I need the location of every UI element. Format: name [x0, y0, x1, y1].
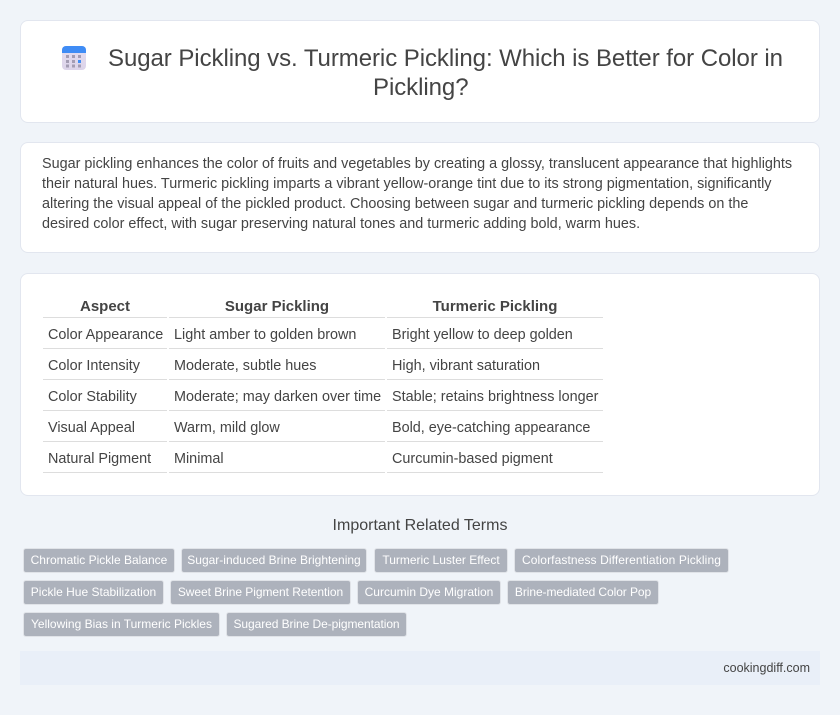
row: Color Intensity: Color Intensity — [48, 358, 140, 374]
comparison table: Bright yellow to deep golden — [392, 327, 573, 343]
header: Sugar Pickling: Sugar Pickling — [225, 298, 329, 315]
footer source: cookingdiff.com — [723, 661, 810, 675]
related terms tags — [23, 548, 729, 637]
related terms heading: Important Related Terms — [333, 517, 507, 534]
comparison table panel — [20, 273, 820, 496]
tag: Yellowing Bias in Turmeric Pickles — [31, 617, 212, 631]
tag — [23, 612, 220, 637]
tag — [23, 548, 175, 573]
comparison table: High, vibrant saturation — [392, 358, 540, 374]
tag — [170, 580, 351, 605]
tag — [507, 580, 659, 605]
icon: calendar — [62, 46, 86, 70]
comparison table: Bold, eye-catching appearance — [392, 420, 590, 436]
intro text: Sugar pickling enhances the color of fruits and vegetables by creating a glossy, translucent appearance that highlights — [42, 156, 792, 172]
comparison table: Warm, mild glow — [174, 420, 280, 436]
tag: Sweet Brine Pigment Retention — [178, 585, 343, 599]
tag — [181, 548, 367, 573]
intro text — [42, 156, 792, 232]
tag: Colorfastness Differentiation Pickling — [522, 553, 721, 567]
header: Turmeric Pickling: Turmeric Pickling — [433, 298, 557, 315]
tag: Curcumin Dye Migration — [365, 585, 493, 599]
header: Aspect: Aspect — [80, 298, 130, 315]
row: Color Stability: Color Stability — [48, 389, 137, 405]
comparison table: Minimal — [174, 451, 224, 467]
title — [108, 45, 783, 101]
row: Color Appearance: Color Appearance — [48, 327, 163, 343]
row: Natural Pigment: Natural Pigment — [48, 451, 151, 467]
footer bar — [20, 651, 820, 685]
comparison table: Moderate, subtle hues — [174, 358, 316, 374]
tag: Sugared Brine De-pigmentation — [233, 617, 400, 631]
row: Visual Appeal: Visual Appeal — [48, 420, 135, 436]
tag: Sugar-induced Brine Brightening — [187, 553, 361, 567]
tag: Brine-mediated Color Pop — [515, 585, 651, 599]
tag — [23, 580, 164, 605]
header panel — [20, 20, 820, 123]
intro text: desired color effect, with sugar preserving natural tones and turmeric adding bold, warm hues. — [42, 216, 640, 232]
text: Pickling? — [373, 74, 469, 101]
text: Sugar Pickling vs. Turmeric Pickling: Which is Better for Color in — [108, 45, 783, 72]
comparison table: Stable; retains brightness longer — [392, 389, 598, 405]
tag: Pickle Hue Stabilization — [31, 585, 156, 599]
intro text: their natural hues. Turmeric pickling imparts a vibrant yellow-orange tint due to its strong pigmentation, significantly — [42, 176, 771, 192]
intro panel — [20, 142, 820, 253]
comparison table — [43, 298, 603, 473]
intro text: altering the visual appeal of the pickled product. Choosing between sugar and turmeric pickling depends on the — [42, 196, 748, 212]
comparison table: Curcumin-based pigment — [392, 451, 553, 467]
tag — [226, 612, 407, 637]
comparison table: Moderate; may darken over time — [174, 389, 381, 405]
tag: Turmeric Luster Effect — [382, 553, 500, 567]
tag — [374, 548, 508, 573]
comparison table: Light amber to golden brown — [174, 327, 356, 343]
tag — [514, 548, 729, 573]
tag: Chromatic Pickle Balance — [31, 553, 167, 567]
tag — [357, 580, 501, 605]
